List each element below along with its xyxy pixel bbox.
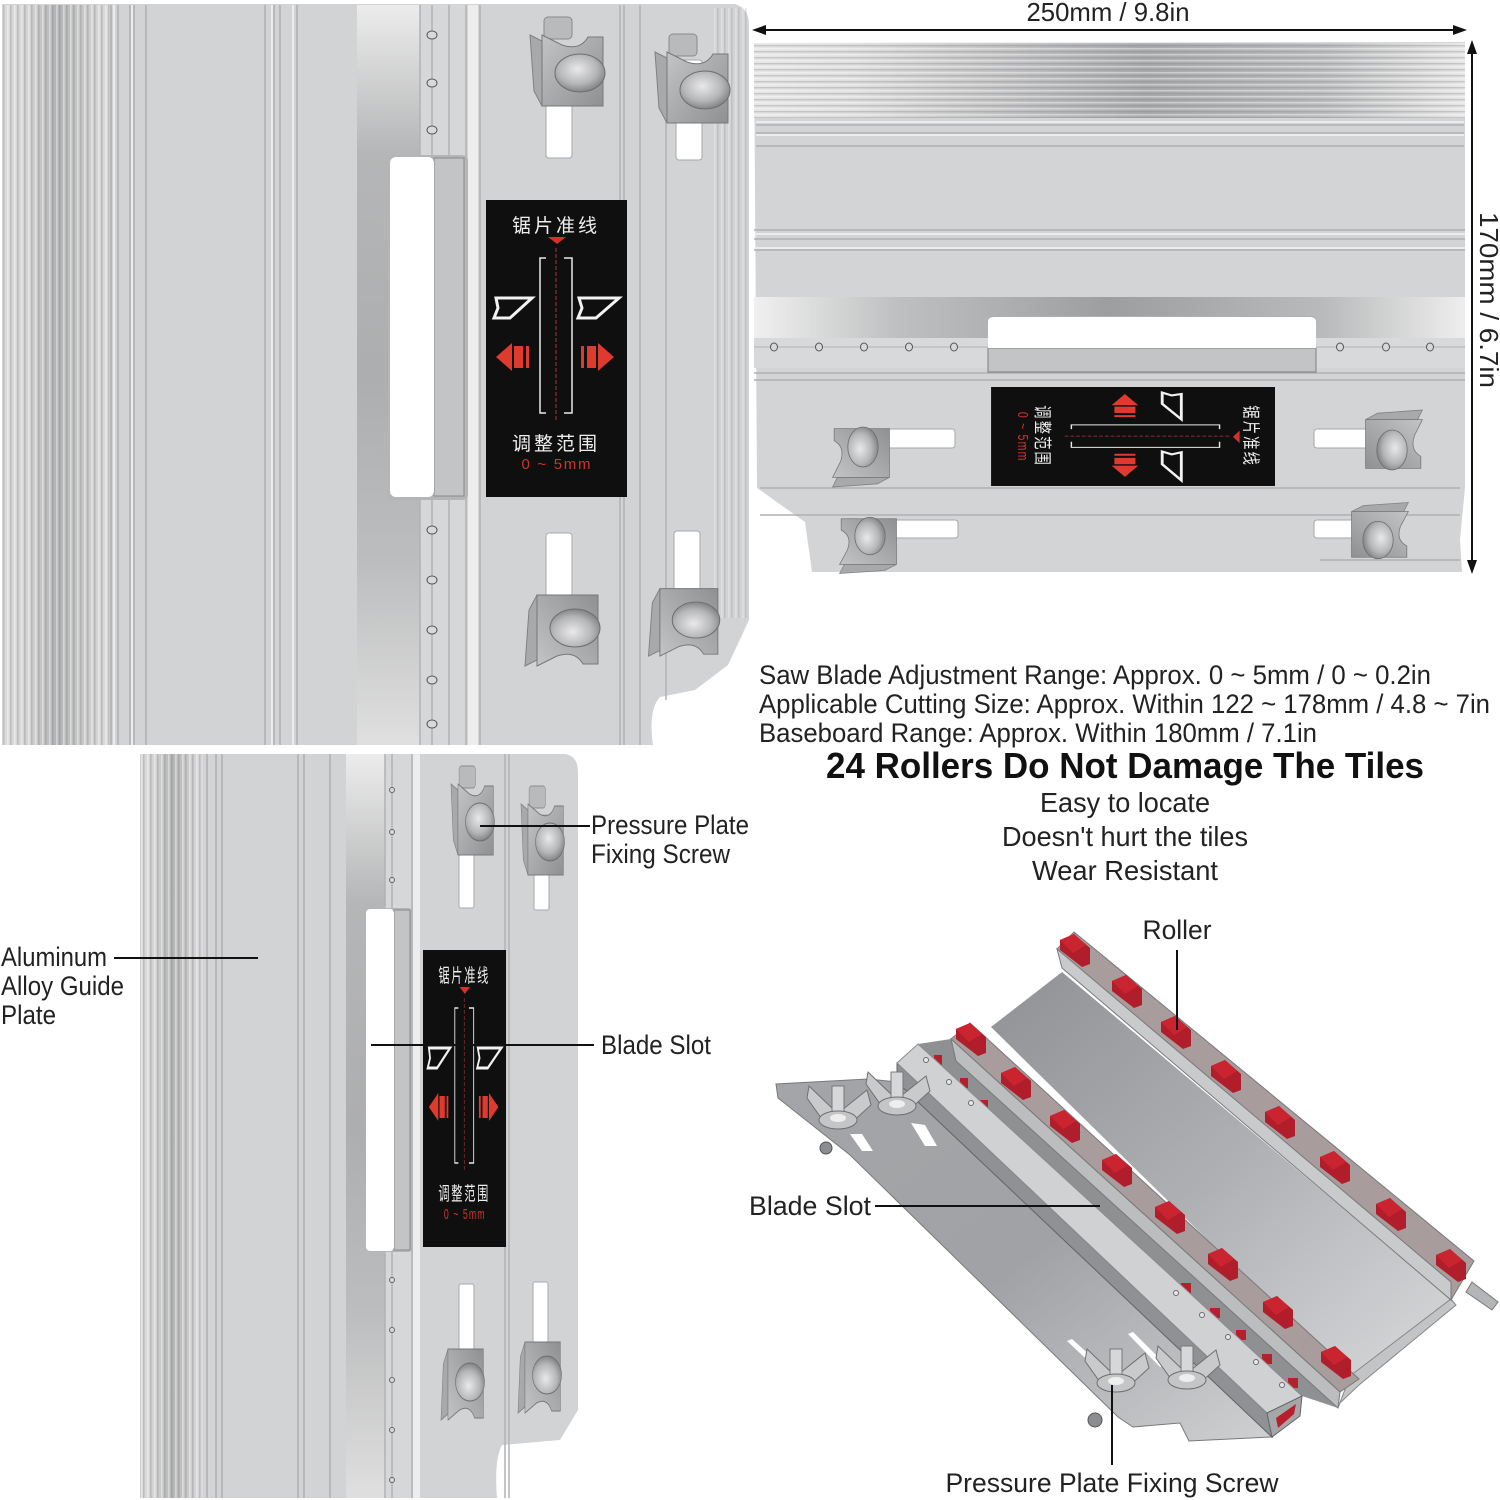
heading: 24 Rollers Do Not Damage The Tiles xyxy=(826,745,1424,786)
lip and pipe xyxy=(1338,1299,1456,1408)
label sticker: 0 ~ 5mm xyxy=(444,1206,485,1223)
callout: aluminum alloy guide plate xyxy=(1,942,258,1030)
clamps xyxy=(441,766,564,1420)
label sticker: 调整范围 xyxy=(512,433,600,455)
base plate xyxy=(776,1079,1272,1441)
holes xyxy=(770,343,1434,351)
wing nuts xyxy=(807,1072,1220,1392)
label sticker xyxy=(486,200,627,497)
blade slot xyxy=(366,908,412,1252)
callout: aluminum alloy guide plate: Aluminum xyxy=(1,942,107,972)
feature list: Easy to locate xyxy=(1040,787,1210,818)
hidden rollers xyxy=(934,1055,1298,1388)
callout: pressure plate fixing screw: Pressure Plate xyxy=(591,810,749,840)
panel: top-left plate photo xyxy=(2,4,749,745)
slits xyxy=(546,60,702,613)
label sticker xyxy=(991,387,1275,486)
spec text block: Baseboard Range: Approx. Within 180mm / 7.1in xyxy=(759,718,1317,748)
label sticker: 锯片准线 xyxy=(1240,405,1260,467)
clamps xyxy=(833,410,1422,574)
slits xyxy=(459,810,549,1364)
dimension: width xyxy=(752,0,1467,35)
callout: blade slot right: Blade Slot xyxy=(749,1191,871,1221)
callout: pressure plate fixing screw xyxy=(480,810,749,869)
tube holes xyxy=(924,1058,1284,1388)
middle channel wall xyxy=(951,1039,1340,1408)
callout: blade slot left: Blade Slot xyxy=(601,1030,711,1060)
blade slot xyxy=(988,316,1316,372)
callout: roller xyxy=(1142,915,1212,1030)
right rollers xyxy=(1060,934,1466,1282)
panel: top-right plate photo xyxy=(754,42,1465,574)
callout: aluminum alloy guide plate: Alloy Guide xyxy=(1,971,124,1001)
clamps xyxy=(525,17,730,666)
right channel interior xyxy=(1057,932,1474,1300)
label sticker: 锯片准线 xyxy=(512,215,600,237)
label sticker: 锯片准线 xyxy=(438,965,490,987)
slits xyxy=(885,429,1394,538)
feature list: Wear Resistant xyxy=(1032,855,1218,886)
label sticker: 0 ~ 5mm xyxy=(1014,412,1030,460)
callout: pressure plate fixing screw bottom: Pressure Plate Fixing Screw xyxy=(946,1468,1279,1498)
middle rollers xyxy=(956,1023,1351,1379)
callout: aluminum alloy guide plate: Plate xyxy=(1,1000,56,1030)
feature list: Doesn't hurt the tiles xyxy=(1002,821,1248,852)
callout: pressure plate fixing screw: Fixing Screw xyxy=(591,839,730,869)
mount bolts xyxy=(820,1142,1102,1427)
blade slot xyxy=(388,155,468,500)
callout: roller: Roller xyxy=(1142,915,1212,945)
panel: roller guide photo xyxy=(776,932,1498,1441)
tube xyxy=(897,1063,1272,1437)
panel: bottom-left plate photo xyxy=(140,754,578,1498)
label sticker xyxy=(423,950,506,1247)
spec text block: Saw Blade Adjustment Range: Approx. 0 ~ 5mm / 0 ~ 0.2in xyxy=(759,660,1431,690)
base slits xyxy=(850,1123,1166,1370)
dimension: height xyxy=(1467,40,1500,574)
middle channel interior xyxy=(951,1023,1359,1392)
holes xyxy=(390,788,394,1482)
right channel wall xyxy=(1057,949,1451,1300)
label sticker: 调整范围 xyxy=(438,1183,490,1205)
feature list xyxy=(1002,787,1248,886)
label sticker: 0 ~ 5mm xyxy=(522,456,590,473)
gap between tube and middle channel xyxy=(918,1039,1338,1408)
holes xyxy=(427,31,437,728)
label sticker: 调整范围 xyxy=(1031,405,1052,467)
floor plate xyxy=(991,972,1451,1379)
spec text block xyxy=(759,660,1490,748)
